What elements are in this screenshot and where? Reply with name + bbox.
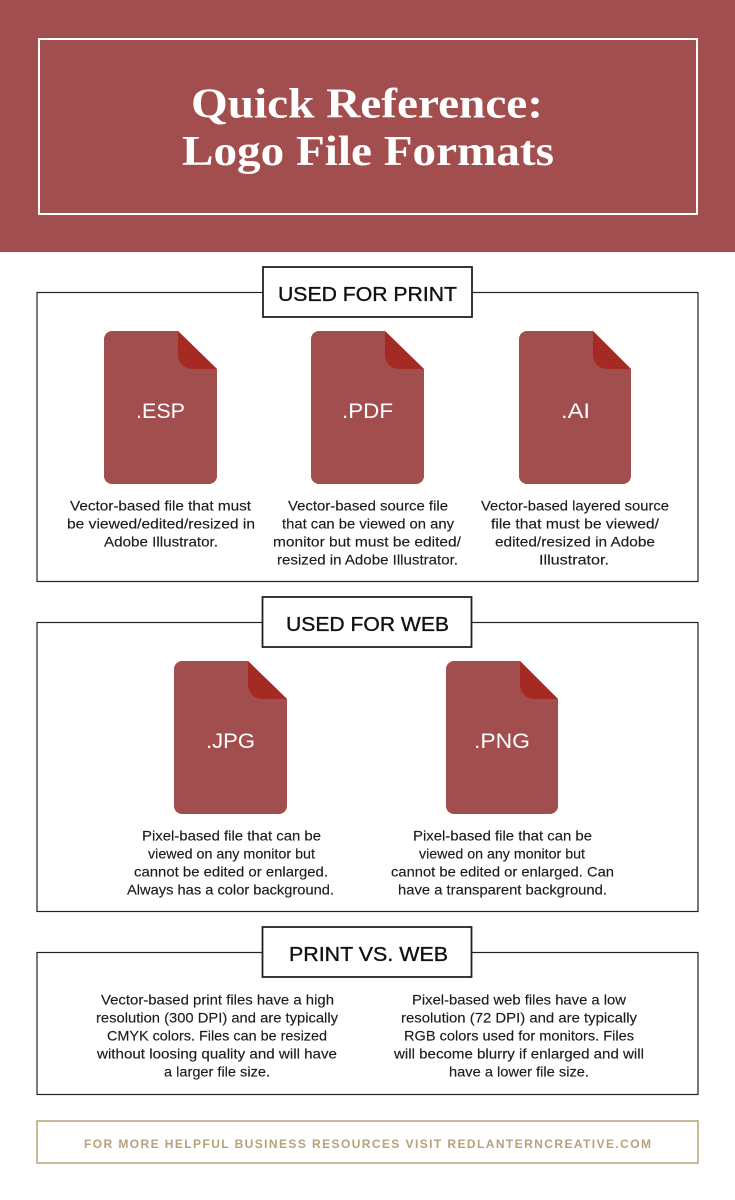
heading: print vs. web: PRINT VS. WEB — [289, 944, 448, 966]
text: ESP description: Adobe Illustrator. — [104, 534, 218, 550]
footer callout: FOR MORE HELPFUL BUSINESS RESOURCES VISIT REDLANTERNCREATIVE.COM — [84, 1137, 651, 1151]
text: web files summary: have a lower file size. — [449, 1064, 589, 1080]
text: PDF description — [273, 498, 461, 568]
text: JPG description: Pixel-based file that can be — [142, 828, 321, 844]
text: PDF description: monitor but must be edited/ — [273, 534, 461, 550]
text: web files summary: resolution (72 DPI) and are typically — [401, 1010, 637, 1026]
text: web files summary: RGB colors used for monitors. Files — [404, 1028, 634, 1044]
text: PNG description: Pixel-based file that can be — [413, 828, 592, 844]
heading: used for web: USED FOR WEB — [286, 614, 449, 636]
title — [182, 82, 554, 175]
icon: JPG file — [174, 661, 287, 814]
heading: used for print: USED FOR PRINT — [278, 284, 457, 306]
heading: print vs. web — [262, 927, 472, 977]
text: print files summary: without loosing quality and will have — [96, 1046, 337, 1062]
icon: ESP file — [104, 331, 217, 484]
text: PDF description: Vector-based source file — [288, 498, 448, 514]
text: AI description: Vector-based layered source — [481, 498, 669, 514]
icon: AI file: .AI — [561, 400, 590, 423]
text: web files summary: will become blurry if enlarged and will — [393, 1046, 644, 1062]
text: web files summary — [393, 992, 644, 1080]
heading: used for web — [262, 597, 472, 647]
text: ESP description: be viewed/edited/resized in — [67, 516, 255, 532]
icon: PDF file: .PDF — [342, 400, 393, 423]
title: Logo File Formats — [182, 129, 554, 175]
text: PNG description: have a transparent background. — [398, 882, 607, 898]
text: PNG description: viewed on any monitor but — [419, 846, 585, 862]
icon: PNG file: .PNG — [474, 730, 530, 753]
text: PDF description: that can be viewed on any — [282, 516, 454, 532]
icon: ESP file: .ESP — [136, 400, 185, 423]
text: print files summary — [96, 992, 338, 1080]
text: JPG description: viewed on any monitor but — [148, 846, 315, 862]
text: print files summary: a larger file size. — [164, 1064, 270, 1080]
panel: used for print — [37, 267, 698, 582]
text: print files summary: CMYK colors. Files can be resized — [107, 1028, 327, 1044]
icon: JPG file: .JPG — [206, 730, 255, 753]
heading: used for print — [263, 267, 472, 317]
text: PDF description: resized in Adobe Illustrator. — [277, 552, 458, 568]
icon: PDF file — [311, 331, 424, 484]
text: PNG description: cannot be edited or enlarged. Can — [391, 864, 614, 880]
text: JPG description — [127, 828, 334, 898]
text: print files summary: Vector-based print files have a high — [101, 992, 334, 1008]
text: ESP description — [67, 498, 255, 550]
text: AI description: file that must be viewed/ — [491, 516, 659, 532]
icon: PNG file — [446, 661, 558, 814]
text: print files summary: resolution (300 DPI) and are typically — [96, 1010, 338, 1026]
text: AI description: Illustrator. — [539, 552, 609, 568]
footer callout — [37, 1121, 698, 1163]
icon: AI file — [519, 331, 631, 484]
title: Quick Reference: — [191, 82, 543, 128]
header banner — [0, 0, 735, 252]
text: ESP description: Vector-based file that must — [70, 498, 251, 514]
text: JPG description: cannot be edited or enlarged. — [134, 864, 328, 880]
text: AI description: edited/resized in Adobe — [495, 534, 655, 550]
text: JPG description: Always has a color background. — [127, 882, 334, 898]
text: PNG description — [391, 828, 614, 898]
panel: used for web — [37, 597, 698, 912]
text: web files summary: Pixel-based web files have a low — [412, 992, 627, 1008]
text: AI description — [481, 498, 669, 568]
panel: print vs. web — [37, 927, 698, 1094]
